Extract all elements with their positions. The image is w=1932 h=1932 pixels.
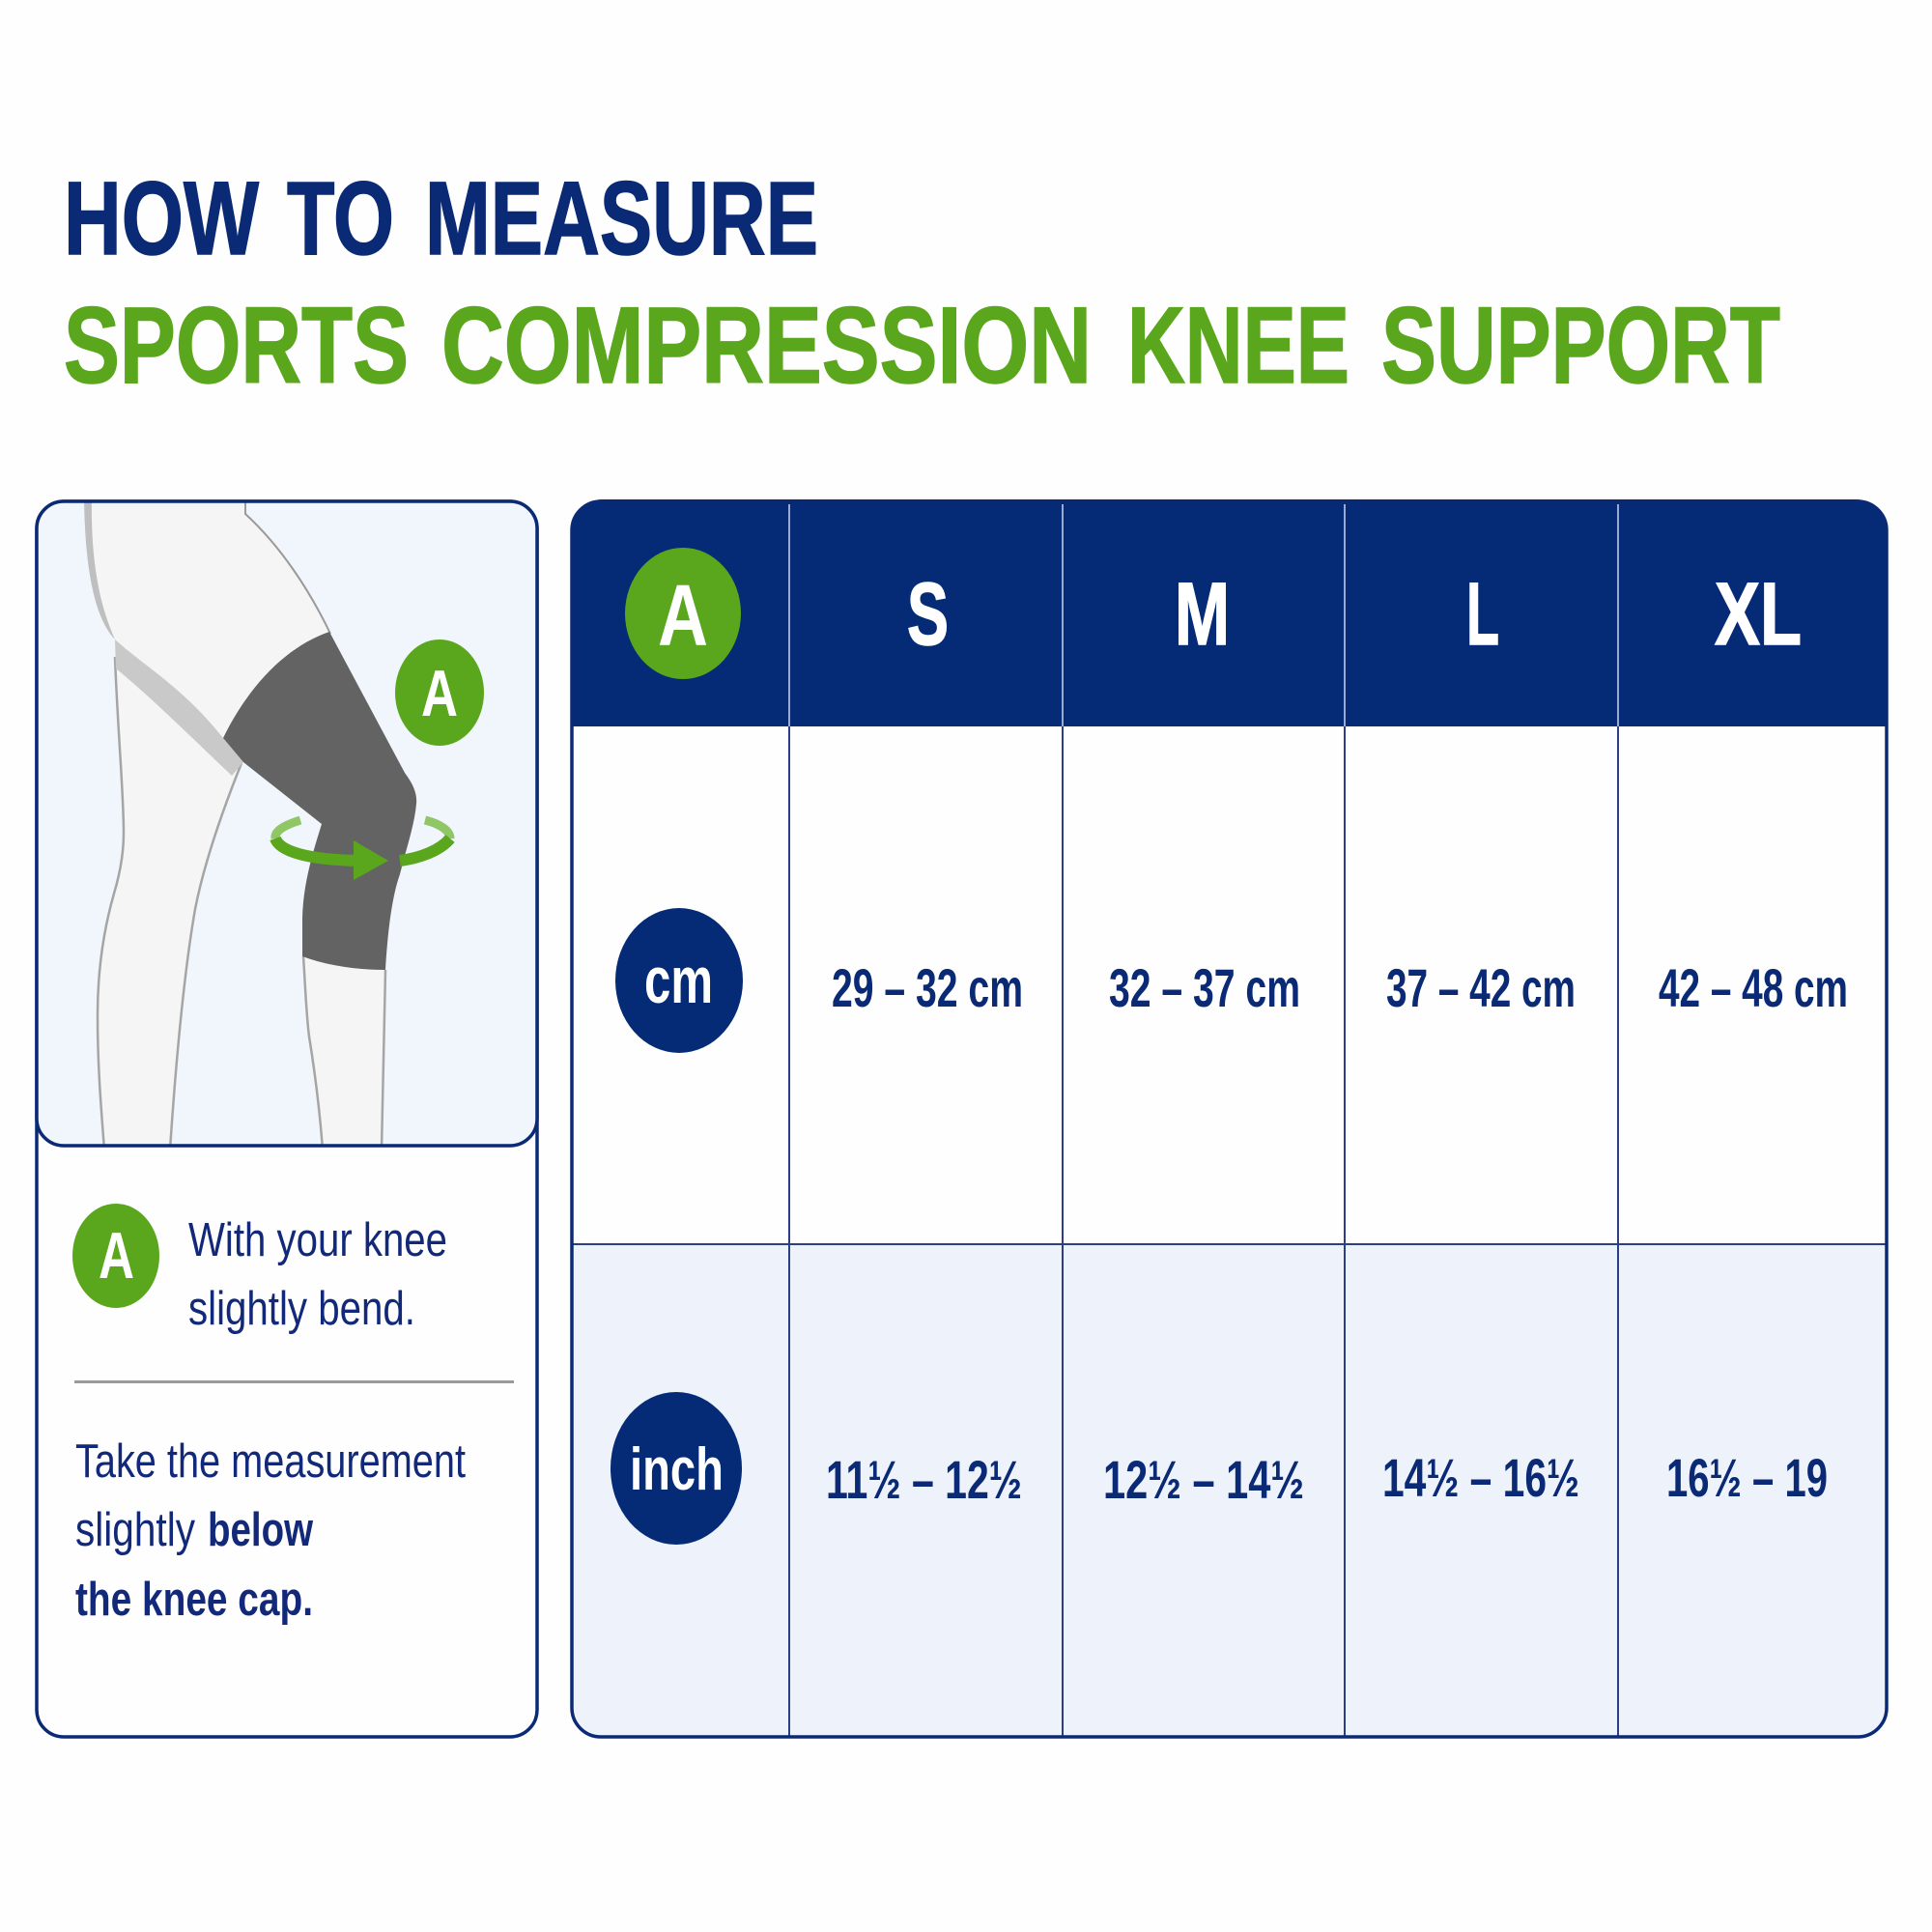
title line: product name: [64, 285, 1780, 406]
cm badge: cm: [644, 944, 713, 1017]
measurement arrow: [275, 820, 450, 880]
step A text: With your knee: [188, 1214, 447, 1266]
cm value M: 32 – 37 cm: [1109, 957, 1300, 1018]
lower leg: [303, 956, 385, 1150]
knee illustration: [37, 497, 537, 1150]
title line: how to measure: TO: [287, 159, 394, 276]
step A badge: A: [99, 1219, 134, 1293]
step A badge: [72, 1204, 159, 1308]
title line: product name: SUPPORT: [1381, 285, 1780, 406]
title: [64, 159, 1780, 406]
title line: product name: KNEE: [1127, 285, 1350, 406]
measurement instruction text: slightly: [75, 1504, 195, 1556]
panel: how to measure instructions: [37, 497, 537, 1737]
measurement instruction text: below: [208, 1504, 314, 1556]
step A text: slightly bend.: [188, 1283, 415, 1335]
cm value S: 29 – 32 cm: [832, 957, 1023, 1018]
size XL: XL: [1715, 565, 1802, 664]
title line: product name: SPORTS: [64, 285, 409, 406]
rear leg: [98, 638, 243, 1150]
inch badge: [611, 1392, 742, 1545]
inch badge: inch: [630, 1436, 724, 1503]
inch value M: 12½ – 14½: [1103, 1449, 1304, 1510]
inch row background: [572, 1244, 1887, 1737]
measurement instruction text: the knee cap.: [75, 1574, 313, 1626]
inch value L: 14½ – 16½: [1382, 1447, 1579, 1508]
compression sleeve: [223, 632, 416, 970]
measurement instruction text: Take the measurement: [75, 1435, 466, 1488]
underside band: [115, 639, 243, 776]
badge A in header: A: [658, 568, 708, 665]
cm value XL: 42 – 48 cm: [1659, 957, 1848, 1018]
back shadow strip: [84, 497, 115, 639]
title line: how to measure: MEASURE: [425, 159, 818, 276]
title line: product name: COMPRESSION: [441, 285, 1092, 406]
thigh: [84, 497, 330, 740]
inch row: [611, 1392, 1828, 1545]
inch value S: 11½ – 12½: [826, 1449, 1022, 1510]
measurement instruction text: [75, 1435, 466, 1626]
badge A on illustration: [395, 639, 484, 746]
cm value L: 37 – 42 cm: [1386, 957, 1576, 1018]
size L: L: [1466, 565, 1499, 664]
cm row: [615, 908, 1848, 1053]
badge A in header: [625, 548, 741, 679]
panel: size table: [572, 499, 1887, 1737]
inch value XL: 16½ – 19: [1666, 1447, 1828, 1508]
badge A on illustration: A: [421, 657, 458, 730]
header row: [572, 499, 1887, 726]
size S: S: [907, 565, 949, 664]
title line: how to measure: HOW: [64, 159, 259, 276]
step A text: [188, 1214, 447, 1335]
cm badge: [615, 908, 743, 1053]
title line: how to measure: [64, 159, 818, 276]
size M: M: [1175, 565, 1230, 664]
